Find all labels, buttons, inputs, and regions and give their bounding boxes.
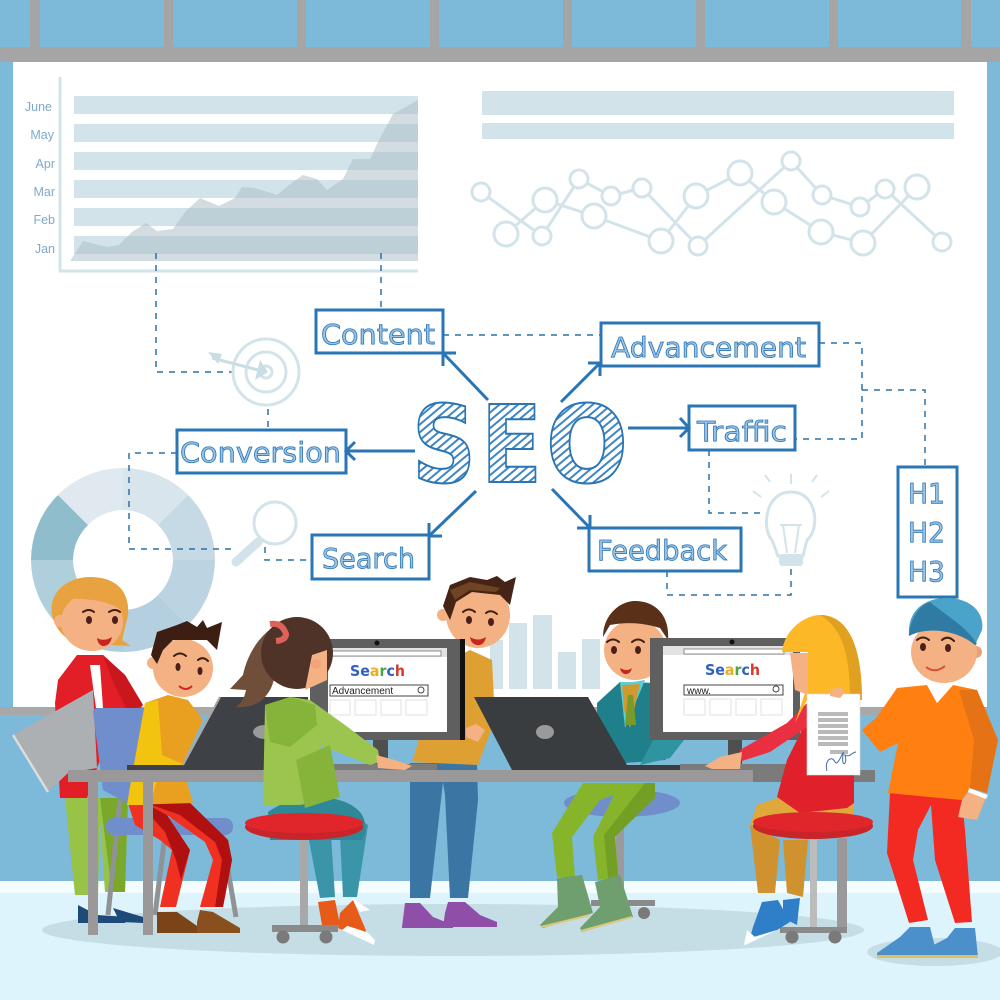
- person: seated boy in teal jacket: [564, 601, 684, 919]
- box: Traffic: Traffic: [696, 415, 787, 448]
- table: [68, 770, 875, 935]
- person: standing boy: [402, 576, 516, 928]
- box: Content: Content: [321, 318, 435, 351]
- box: Feedback: Feedback: [597, 534, 728, 567]
- SEO heading: [412, 384, 628, 508]
- person: woman in red jacket: [13, 577, 143, 923]
- bar chart behind team: [490, 615, 600, 689]
- box: Search: [312, 535, 429, 579]
- icon: target with arrow: [208, 339, 299, 405]
- box: Feedback: [589, 528, 741, 571]
- arrow: to Traffic: [628, 418, 689, 437]
- document with signature: [807, 687, 860, 775]
- floor: [0, 881, 1000, 1000]
- arrow: to Advancement: [561, 363, 600, 402]
- whiteboard panel: [13, 62, 987, 708]
- monitor: left with search: Advancement: [332, 686, 393, 697]
- area chart: monthly growth: Apr: [36, 157, 55, 171]
- SEO heading: O: [546, 384, 628, 508]
- laptop: left: [127, 697, 308, 771]
- monitor: right with search: Search: [705, 661, 760, 679]
- person: boy in orange sweater and cap: [862, 598, 998, 958]
- person: seated boy green trousers and boots: [540, 783, 655, 932]
- hand of standing boy: [466, 724, 485, 742]
- person: girl with long blonde hair: [705, 615, 862, 945]
- monitor: left with search: [310, 639, 465, 770]
- icon: magnifier: [236, 502, 296, 562]
- box: Traffic: [689, 406, 795, 450]
- header placeholder bars: [482, 91, 954, 139]
- arrow: to Content: [443, 353, 488, 400]
- box: headings H1 H2 H3: [898, 467, 957, 597]
- network line chart: [472, 152, 951, 255]
- arrow: to Feedback: [552, 489, 590, 528]
- folder: [13, 690, 97, 792]
- box: Advancement: Advancement: [611, 331, 806, 364]
- SEO heading: E: [481, 384, 542, 508]
- monitor: left with search: Search: [350, 662, 405, 680]
- icon: light bulb: [753, 474, 829, 566]
- box: headings H1 H2 H3: H3: [908, 555, 945, 588]
- area chart: monthly growth: [25, 77, 418, 271]
- SEO heading: S: [412, 384, 476, 508]
- stool: red left: [272, 835, 338, 944]
- area chart: monthly growth: May: [30, 128, 55, 142]
- person: girl in green hoodie: [230, 617, 412, 945]
- laptop: right: [474, 697, 680, 770]
- stool: red right: [780, 838, 847, 944]
- dashed connectors: [129, 253, 925, 595]
- area chart: monthly growth: Mar: [33, 185, 55, 199]
- area chart: monthly growth: June: [25, 100, 52, 114]
- arrow: to Search: [429, 491, 476, 536]
- stool seat: red right: [753, 812, 873, 839]
- arrow: to Conversion: [346, 442, 415, 460]
- person: boy in yellow sweater: [127, 620, 240, 933]
- area chart: monthly growth: Jan: [35, 242, 55, 256]
- whiteboard tray: [0, 707, 987, 715]
- box: headings H1 H2 H3: H1: [908, 477, 945, 510]
- donut chart: [31, 468, 215, 652]
- box: headings H1 H2 H3: H2: [908, 516, 945, 549]
- stool seat: red left: [245, 813, 363, 840]
- chair: blue: [93, 708, 236, 917]
- area chart: monthly growth: Feb: [33, 213, 55, 227]
- monitor: right with search: www.: [686, 686, 711, 697]
- box: Content: [316, 310, 443, 353]
- box: Advancement: [601, 323, 819, 366]
- window frame: [0, 0, 1000, 62]
- box: Search: Search: [322, 542, 415, 575]
- box: Conversion: Conversion: [180, 436, 341, 469]
- monitor: right with search: [650, 638, 800, 770]
